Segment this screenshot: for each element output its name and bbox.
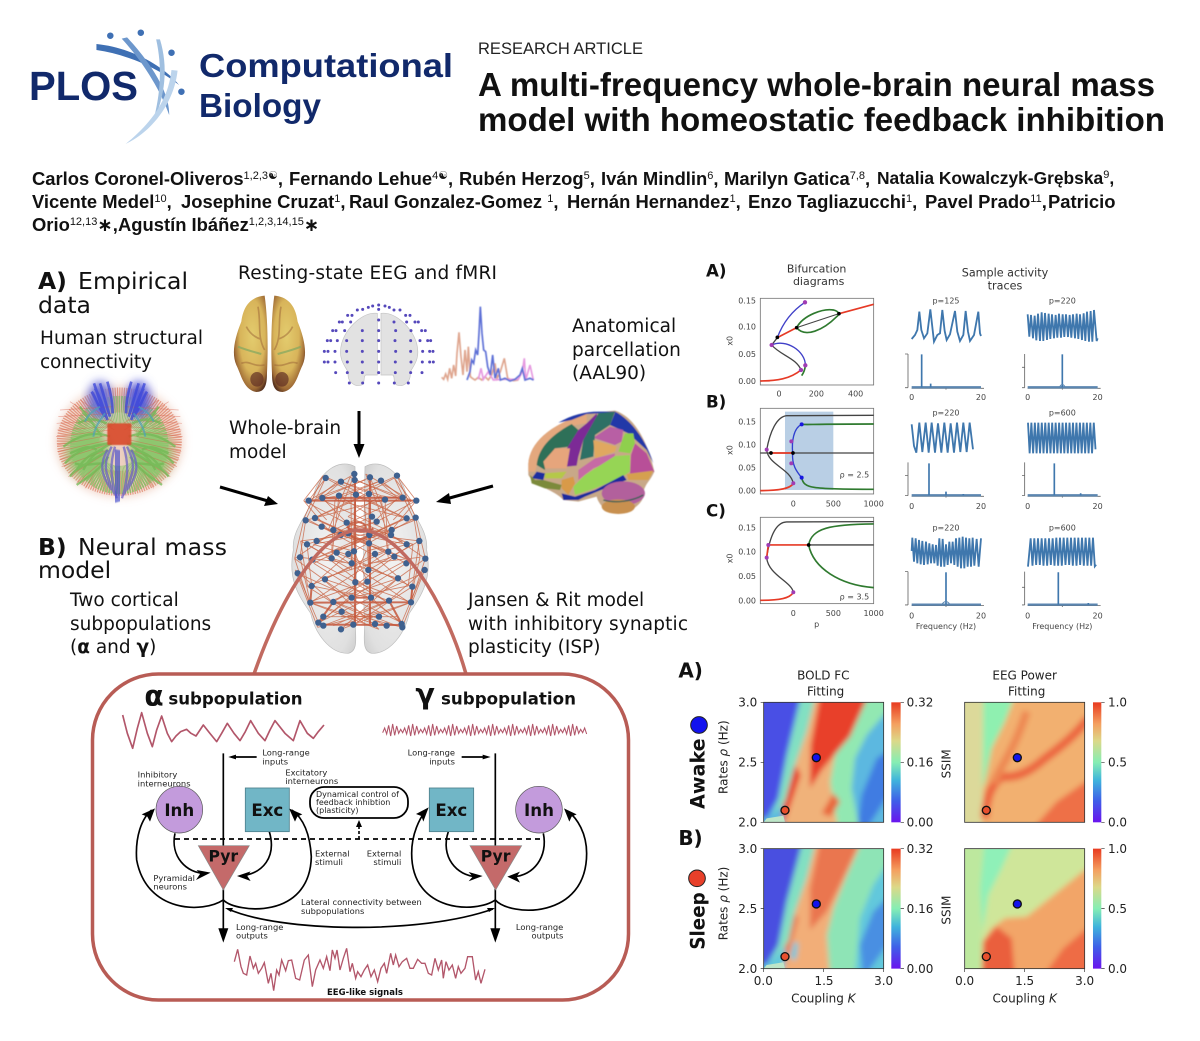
trace row 3 right p=600: p=600 xyxy=(1049,524,1076,533)
text: whole-brain model: model xyxy=(229,442,287,463)
text: two cortical subpopulations: subpopulations xyxy=(70,614,211,635)
label A: A) xyxy=(706,262,727,281)
trace row 1 left p=125 xyxy=(905,297,986,402)
colorbar and axis labels awake BOLD: 2.5 xyxy=(738,756,757,770)
colorbar and axis labels sleep EEG: 1.0 xyxy=(1108,842,1127,856)
trace row 2 right p=600: 20 xyxy=(1093,502,1103,511)
bifurcation plot B: 0 xyxy=(791,500,796,509)
plasticity control box xyxy=(310,787,408,818)
external stimuli label: stimuli xyxy=(315,857,343,867)
awake label with blue marker: Awake xyxy=(686,738,709,809)
bifurcation plot C: x0 xyxy=(726,553,735,563)
traces title: traces xyxy=(988,279,1022,292)
column title xyxy=(992,669,1057,699)
trace row 1 right p=220: 20 xyxy=(1093,393,1103,402)
gamma wave trace xyxy=(383,724,587,736)
bifurcation plot B: ρ = 2.5 xyxy=(840,471,869,480)
trace row 1 left p=125: p=125 xyxy=(932,297,959,306)
article title: A multi-frequency whole-brain neural mass xyxy=(478,66,1155,103)
traces title: Sample activity xyxy=(962,267,1049,280)
trace row 1 left p=125: 20 xyxy=(976,393,986,402)
colorbar and axis labels sleep EEG: 3.0 xyxy=(1075,974,1094,988)
colorbar and axis labels sleep BOLD: 0.00 xyxy=(907,962,933,976)
colorbar and axis labels sleep BOLD: 3.0 xyxy=(874,974,893,988)
colorbar and axis labels sleep EEG: Coupling K xyxy=(992,991,1058,1005)
bifurcation plot A: 200 xyxy=(809,390,824,399)
trace row 2 left p=220: 20 xyxy=(976,502,986,511)
colorbar awake EEG xyxy=(1093,696,1127,830)
long-range inputs label xyxy=(408,748,455,766)
author list xyxy=(32,168,1115,235)
bifurcation plot C: ρ = 3.5 xyxy=(840,592,869,601)
external stimuli label xyxy=(315,849,350,867)
Inh node xyxy=(156,786,203,833)
panel: EEG power fitting heatmaps xyxy=(955,669,1127,1005)
trace row 1 left p=125: 0 xyxy=(909,393,914,402)
Pyr node: Pyr xyxy=(208,847,238,866)
trace row 3 left p=220: 20 xyxy=(976,611,986,620)
trace row 2 right p=600 xyxy=(1022,408,1103,511)
long-range outputs label: Long-range xyxy=(516,922,563,932)
bifurcation plot A: 0.15 xyxy=(738,297,756,306)
colorbar awake EEG: 0.0 xyxy=(1108,816,1127,830)
long-range outputs label xyxy=(236,922,283,941)
bifurcation plot C: 0.05 xyxy=(738,572,756,581)
colorbar and axis labels sleep BOLD: Coupling K xyxy=(791,991,857,1005)
author list: Hernán Hernandez1, xyxy=(567,191,741,212)
column title: BOLD FC xyxy=(797,669,850,683)
plasticity control box: (plasticity) xyxy=(316,806,358,815)
inhibitory label: interneurons xyxy=(138,778,191,788)
bifurcation plot B: 0.10 xyxy=(738,440,756,449)
logo word Computational: Computational xyxy=(199,47,453,84)
bifurcation plot B: 1000 xyxy=(863,500,884,509)
EEG-like signals label: EEG-like signals xyxy=(327,988,403,998)
trace row 3 left p=220: Frequency (Hz) xyxy=(916,622,976,631)
bifurcation plot C: p xyxy=(814,620,819,629)
trace row 2 right p=600: p=600 xyxy=(1049,408,1076,417)
Exc node: Exc xyxy=(435,801,467,820)
colorbar and axis labels awake BOLD: 0.16 xyxy=(907,756,933,770)
text: anatomical parcellation: parcellation xyxy=(572,340,681,361)
bifurcation plot A: 0.10 xyxy=(738,323,756,332)
colorbar and axis labels sleep EEG: 1.5 xyxy=(1015,974,1034,988)
text: human structural connectivity: connectivity xyxy=(40,352,152,373)
colorbar and axis labels sleep BOLD: 3.0 xyxy=(738,842,757,856)
long-range inputs label: Long-range xyxy=(408,748,455,758)
author list: Natalia Kowalczyk-Grębska9, xyxy=(877,168,1114,188)
bifurcation plot C: 0 xyxy=(791,609,796,618)
image: EEG electrode layout on brain xyxy=(324,305,433,386)
author list: Orio12,13∗, xyxy=(32,214,118,235)
author list: Rubén Herzog5, xyxy=(459,168,595,189)
text: anatomical parcellation: Anatomical xyxy=(572,316,676,337)
text: human structural connectivity xyxy=(40,328,203,373)
logo word Biology: Biology xyxy=(199,87,322,124)
colorbar and axis labels sleep BOLD: 2.5 xyxy=(738,902,757,916)
plasticity control box: Dynamical control of xyxy=(316,790,399,799)
panel: BOLD FC fitting heatmaps xyxy=(678,659,954,1005)
bifurcation plot C: 0.15 xyxy=(738,524,756,533)
author list: Josephine Cruzat1, xyxy=(181,191,346,212)
bifurcation plot A: 0 xyxy=(776,390,782,399)
author list: Iván Mindlin6, xyxy=(601,168,719,189)
journal logo xyxy=(29,33,453,144)
heading: B) Neural mass model: B) xyxy=(38,533,67,561)
Inh node xyxy=(516,786,562,833)
pyramidal to inhibitory arc xyxy=(136,753,311,932)
gamma subpopulation schematic xyxy=(367,676,587,943)
colorbar and axis labels awake BOLD: 0.00 xyxy=(907,816,933,830)
author list: Vicente Medel10, xyxy=(32,191,172,212)
bifurcation plot A: x0 xyxy=(726,336,735,346)
dashed arrow to plasticity box xyxy=(356,820,362,839)
image: whole-brain network xyxy=(292,464,428,653)
heading: B) Neural mass model: Neural mass xyxy=(78,533,227,561)
gamma heading xyxy=(415,676,576,710)
text: anatomical parcellation xyxy=(572,316,681,384)
trace row 1 right p=220 xyxy=(1022,297,1103,402)
lateral connection arrow xyxy=(225,908,495,927)
article type label: RESEARCH ARTICLE xyxy=(478,40,643,58)
trace row 2 right p=600: 0 xyxy=(1025,502,1030,511)
arrow: parcellation to model xyxy=(436,486,493,504)
image: EEG power spectra xyxy=(442,307,534,381)
external stimuli label: External xyxy=(315,849,350,859)
external stimuli label xyxy=(367,849,401,867)
external stimuli label: stimuli xyxy=(373,857,401,867)
text: Jansen and Rit model xyxy=(467,590,688,658)
column title xyxy=(797,669,850,699)
gamma heading: γ xyxy=(415,676,435,710)
network edges xyxy=(295,474,425,629)
dome linking network to neural mass panel xyxy=(254,530,466,674)
sleep label with red marker: Sleep xyxy=(686,892,709,950)
text: human structural connectivity: Human structural xyxy=(40,328,203,349)
alpha wave trace xyxy=(123,713,324,748)
bifurcation plot B: x0 xyxy=(726,445,735,455)
heading: A) Empirical data: data xyxy=(38,291,91,319)
text: anatomical parcellation: (AAL90) xyxy=(572,363,646,384)
pyramidal neurons label: Pyramidal xyxy=(153,873,195,883)
heatmap: awake BOLD FC xyxy=(763,702,884,823)
heading: A) Empirical data xyxy=(38,267,188,319)
alpha heading: subpopulation xyxy=(168,689,303,708)
author list: Pavel Prado11, xyxy=(925,191,1047,212)
panel: sample activity traces xyxy=(905,267,1103,631)
trace row 3 right p=600: Frequency (Hz) xyxy=(1032,622,1092,631)
trace row 3 left p=220: 0 xyxy=(909,611,914,620)
bifurcation plot C: 500 xyxy=(826,609,841,618)
heading: A) Empirical data: Empirical xyxy=(78,267,188,295)
logo word PLOS: PLOS xyxy=(29,63,138,109)
text: two cortical subpopulations: Two cortical xyxy=(69,590,179,611)
trace row 3 left p=220 xyxy=(905,524,986,631)
bifurcation plot B: 0.15 xyxy=(738,417,756,426)
logo swoosh streaks xyxy=(96,37,179,144)
lateral connectivity label: Lateral connectivity between xyxy=(301,897,422,907)
long-range outputs label xyxy=(516,922,563,941)
bifurcation plot A: 0.00 xyxy=(738,377,756,386)
long-range outputs label: outputs xyxy=(236,931,268,941)
panel: bifurcation diagrams xyxy=(706,262,884,629)
dashed plasticity line xyxy=(175,838,543,840)
bifurcation plot B: 500 xyxy=(826,500,841,509)
column title: EEG Power xyxy=(992,669,1057,683)
colorbar and axis labels sleep BOLD: Rates ρ (Hz) xyxy=(716,867,730,940)
trace row 3 left p=220: p=220 xyxy=(932,524,959,533)
label C: C) xyxy=(706,502,726,521)
arrow: structural connectivity to model xyxy=(220,487,278,506)
colorbar and axis labels sleep BOLD: 1.5 xyxy=(814,974,834,988)
Inh node: Inh xyxy=(164,801,194,820)
heading: B) Neural mass model xyxy=(38,533,227,584)
plasticity control box: feedback inhibtion xyxy=(316,798,390,807)
trace row 1 right p=220: 0 xyxy=(1025,393,1030,402)
colorbar awake EEG: 1.0 xyxy=(1108,696,1127,710)
author list: Fernando Lehue4☯, xyxy=(289,168,453,189)
text: resting-state EEG and fMRI: Resting-state EEG and fMRI xyxy=(238,263,497,284)
trace row 3 right p=600: 20 xyxy=(1093,611,1103,620)
bifurcation plot C xyxy=(726,517,884,629)
long-range outputs label: Long-range xyxy=(236,922,283,932)
article title xyxy=(478,66,1165,138)
column title: Fitting xyxy=(807,685,844,699)
heatmap: sleep EEG power xyxy=(964,848,1086,970)
bifurcation plot A: 400 xyxy=(848,390,863,399)
trace row 3 right p=600 xyxy=(1022,524,1103,631)
long-range inputs label: inputs xyxy=(262,756,288,766)
label B: B) xyxy=(678,826,703,850)
colorbar and axis labels sleep BOLD: SSIM xyxy=(940,896,954,925)
excitatory label: interneurons xyxy=(285,776,338,786)
image: AAL90 parcellated brain xyxy=(528,411,654,514)
label A: A) xyxy=(678,659,703,683)
text: Jansen and Rit model: Jansen & Rit model xyxy=(467,590,644,611)
lateral connectivity label: subpopulations xyxy=(301,906,364,916)
column title: Fitting xyxy=(1008,685,1045,699)
alpha heading xyxy=(144,679,303,712)
long-range outputs label: outputs xyxy=(531,931,563,941)
trace row 2 left p=220 xyxy=(905,408,986,511)
colorbar and axis labels sleep BOLD xyxy=(716,842,954,1005)
alpha heading: α xyxy=(144,679,164,712)
colorbar and axis labels sleep EEG: 0.0 xyxy=(955,974,974,988)
excitatory label: Excitatory xyxy=(285,767,327,777)
arrow: EEG and fMRI to model xyxy=(354,411,364,458)
colorbar and axis labels awake BOLD: 3.0 xyxy=(738,696,757,710)
trace row 3 right p=600: 0 xyxy=(1025,611,1030,620)
text: Jansen and Rit model: with inhibitory synaptic xyxy=(468,614,688,635)
panel: neural mass model xyxy=(92,674,628,1000)
Pyr node xyxy=(470,846,522,890)
colorbar awake EEG: 0.5 xyxy=(1108,756,1127,770)
bifurcation title: diagrams xyxy=(793,275,845,288)
colorbar and axis labels awake BOLD: SSIM xyxy=(940,749,954,778)
colorbar and axis labels sleep EEG: 0.5 xyxy=(1108,902,1127,916)
external stimuli label: External xyxy=(367,849,401,859)
label B: B) xyxy=(706,393,726,412)
text: Jansen and Rit model: plasticity (ISP) xyxy=(468,637,600,658)
author list: Marilyn Gatica7,8, xyxy=(724,168,870,189)
colorbar and axis labels sleep EEG xyxy=(955,842,1127,1005)
colorbar and axis labels awake BOLD: 2.0 xyxy=(738,816,757,830)
colorbar and axis labels awake BOLD: 0.32 xyxy=(907,696,933,710)
colorbar and axis labels sleep BOLD: 0.32 xyxy=(907,842,933,856)
gamma heading: subpopulation xyxy=(441,689,576,708)
Exc node: Exc xyxy=(251,801,283,820)
long-range inputs label: Long-range xyxy=(262,748,310,758)
bifurcation plot C: 0.10 xyxy=(738,548,756,557)
colorbar and axis labels sleep BOLD: 2.0 xyxy=(738,962,757,976)
long-range inputs label xyxy=(262,748,310,766)
excitatory label xyxy=(285,767,338,786)
text: two cortical subpopulations xyxy=(69,590,211,658)
EEG-like signal trace xyxy=(234,948,485,991)
heading: B) Neural mass model: model xyxy=(38,556,111,584)
colorbar and axis labels sleep EEG: 0.0 xyxy=(1108,962,1127,976)
alpha subpopulation schematic xyxy=(123,679,350,943)
image: structural connectome tractography xyxy=(56,381,183,502)
image: cortical brain top view xyxy=(234,296,305,392)
trace row 2 left p=220: p=220 xyxy=(932,408,959,417)
bifurcation plot B xyxy=(726,408,884,509)
bifurcation plot C: 1000 xyxy=(863,609,884,618)
text: whole-brain model xyxy=(229,418,341,463)
author list: Enzo Tagliazucchi1, xyxy=(748,191,917,212)
trace row 1 right p=220: p=220 xyxy=(1049,297,1076,306)
article title: model with homeostatic feedback inhibition xyxy=(478,101,1165,138)
traces title xyxy=(962,267,1049,292)
heatmap: sleep BOLD FC xyxy=(763,848,884,970)
trace row 2 left p=220: 0 xyxy=(909,502,914,511)
colorbar and axis labels awake BOLD xyxy=(716,696,954,830)
text: two cortical subpopulations: (α and γ) xyxy=(70,637,156,658)
author list: Agustín Ibáñez1,2,3,14,15∗ xyxy=(118,214,319,235)
gamma connections xyxy=(412,753,587,932)
bifurcation plot A: 0.05 xyxy=(738,350,756,359)
Pyr node: Pyr xyxy=(481,847,511,866)
bifurcation title: Bifurcation xyxy=(787,262,846,275)
long-range inputs label: inputs xyxy=(429,756,455,766)
Exc node xyxy=(429,788,474,832)
inhibitory label xyxy=(138,770,191,788)
text: whole-brain model: Whole-brain xyxy=(229,418,341,439)
colorbar and axis labels sleep BOLD: 0.16 xyxy=(907,902,933,916)
author list: Raul Gonzalez-Gomez 1, xyxy=(349,191,558,212)
logo dots xyxy=(110,33,181,92)
bifurcation plot C: 0.00 xyxy=(738,596,756,605)
Inh node: Inh xyxy=(524,801,554,820)
bifurcation plot B: 0.00 xyxy=(738,487,756,496)
inhibitory label: Inhibitory xyxy=(138,770,177,780)
bifurcation title xyxy=(787,262,846,288)
heatmap: awake EEG power xyxy=(964,702,1086,823)
author list: Patricio xyxy=(1048,191,1115,212)
author list: Carlos Coronel-Oliveros1,2,3☯, xyxy=(32,168,283,189)
lateral connectivity label xyxy=(301,897,422,916)
Exc node xyxy=(245,788,289,832)
pyramidal neurons label: neurons xyxy=(153,882,187,892)
Pyr node xyxy=(198,846,249,890)
colorbar and axis labels sleep BOLD: 0.0 xyxy=(754,974,773,988)
network nodes xyxy=(298,474,425,629)
bifurcation plot A xyxy=(726,297,874,399)
heading: A) Empirical data: A) xyxy=(38,267,67,295)
pyramidal neurons label xyxy=(153,873,195,892)
colorbar and axis labels awake BOLD: Rates ρ (Hz) xyxy=(716,720,730,794)
bifurcation plot B: 0.05 xyxy=(738,463,756,472)
